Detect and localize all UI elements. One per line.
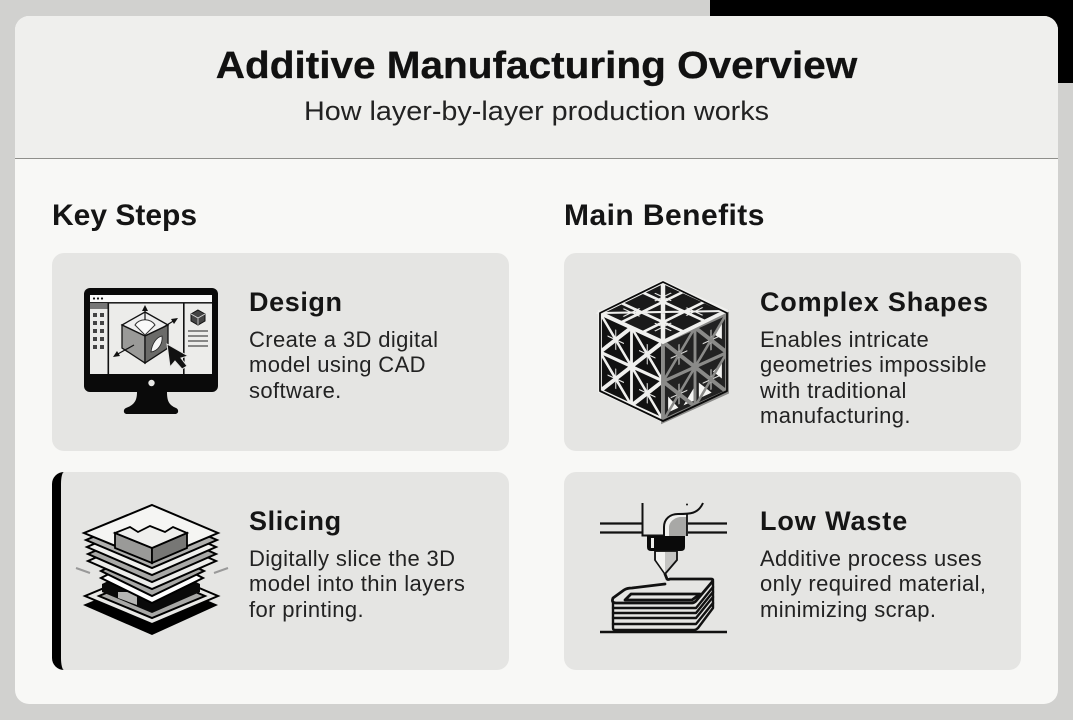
benefit text: low waste: minimizing scrap. bbox=[760, 597, 936, 622]
benefit text: low waste: only required material, bbox=[760, 571, 986, 596]
step text: design: software. bbox=[249, 378, 342, 403]
title: Additive Manufacturing Overview bbox=[216, 45, 857, 87]
step text: slicing: model into thin layers bbox=[249, 571, 465, 596]
step title: slicing: Slicing bbox=[249, 506, 342, 536]
icon: computer monitor with CAD model bbox=[84, 288, 218, 414]
lattice faces bbox=[600, 282, 727, 421]
black corner block bbox=[710, 0, 1073, 83]
icon: 3D printer nozzle bbox=[600, 502, 727, 634]
step text: slicing bbox=[249, 546, 465, 622]
step title: design: Design bbox=[249, 287, 343, 317]
benefit text: complex shapes: manufacturing. bbox=[760, 403, 911, 428]
heading: main benefits: Main Benefits bbox=[564, 199, 765, 232]
step text: slicing: for printing. bbox=[249, 597, 364, 622]
benefit title: complex shapes: Complex Shapes bbox=[760, 287, 989, 317]
benefit text: complex shapes bbox=[760, 327, 987, 428]
step text: slicing: Digitally slice the 3D bbox=[249, 546, 455, 571]
heading: key steps: Key Steps bbox=[52, 199, 197, 232]
panel: design bbox=[52, 253, 509, 451]
icon: lattice cube bbox=[596, 280, 730, 424]
step text: design bbox=[249, 327, 438, 403]
step text: design: Create a 3D digital bbox=[249, 327, 438, 352]
panel: low waste bbox=[564, 472, 1021, 670]
benefit text: low waste bbox=[760, 546, 986, 622]
benefit text: complex shapes: geometries impossible bbox=[760, 352, 987, 377]
benefit title: low waste: Low Waste bbox=[760, 506, 908, 536]
benefit text: low waste: Additive process uses bbox=[760, 546, 982, 571]
benefit text: complex shapes: Enables intricate bbox=[760, 327, 929, 352]
panel: slicing bbox=[52, 472, 509, 670]
step text: design: model using CAD bbox=[249, 352, 426, 377]
benefit text: complex shapes: with traditional bbox=[760, 378, 907, 403]
subtitle: How layer-by-layer production works bbox=[304, 96, 769, 126]
panel: complex shapes bbox=[564, 253, 1021, 451]
header band bbox=[15, 16, 1058, 159]
icon: sliced layers bbox=[76, 504, 228, 635]
